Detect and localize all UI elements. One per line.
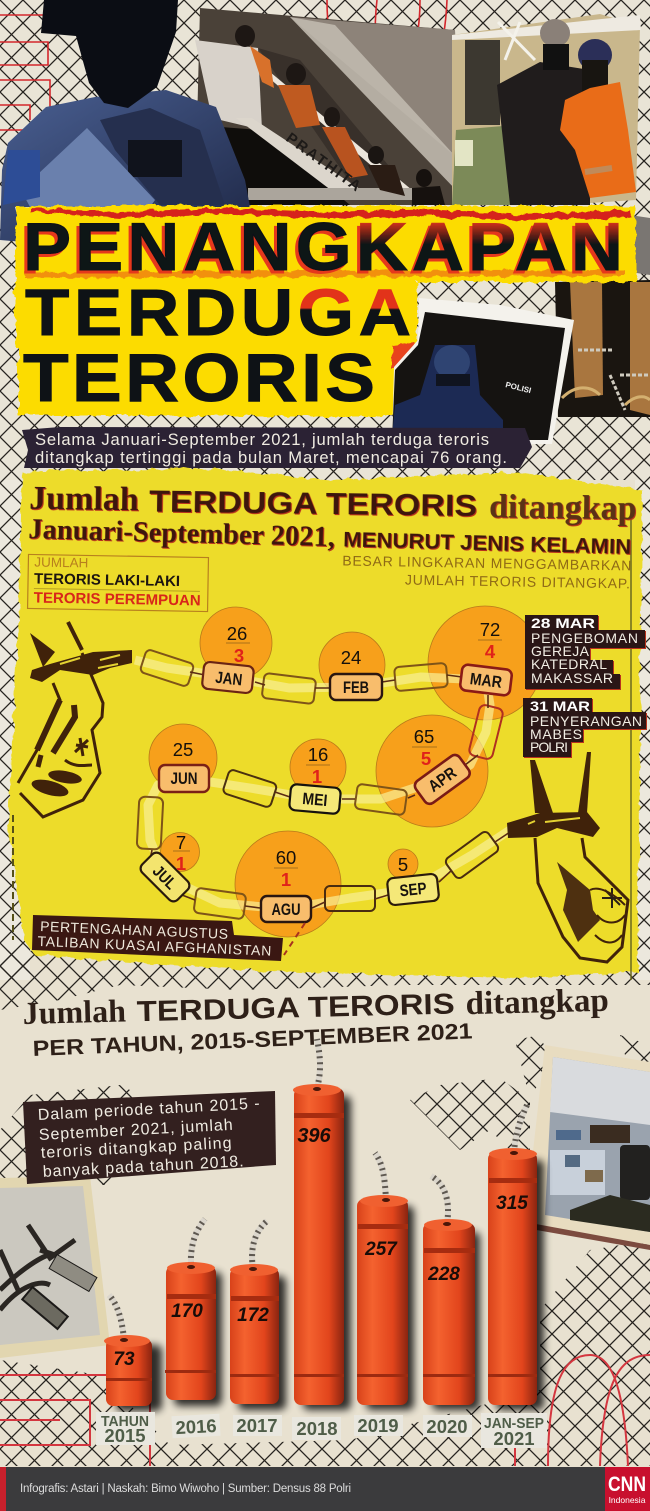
callout: 31 March bbox=[523, 698, 646, 757]
heading: annual: PER TAHUN, 2015-SEPTEMBER 2021 bbox=[32, 1018, 473, 1061]
legend: TERORIS LAKI-LAKI bbox=[34, 571, 180, 590]
bar 2021: 315 bbox=[496, 1193, 528, 1214]
chain links bbox=[137, 649, 504, 919]
callout: 28 March: PENGEBOMAN bbox=[531, 630, 638, 646]
June: JUN bbox=[170, 770, 198, 788]
title: TERDUGA bbox=[25, 275, 411, 349]
July: JUL bbox=[149, 862, 180, 893]
January: JAN bbox=[214, 669, 243, 689]
callout: 28 March bbox=[525, 615, 645, 689]
bubble values: 5 bbox=[398, 854, 408, 875]
May: MEI bbox=[302, 790, 328, 810]
chain glow bbox=[135, 660, 510, 909]
September: SEP bbox=[399, 880, 427, 900]
bubbles bbox=[149, 606, 542, 937]
CNN Indonesia logo bbox=[605, 1467, 650, 1511]
callout: 28 March: KATEDRAL bbox=[531, 656, 607, 672]
label 2019: 2019 bbox=[357, 1415, 399, 1436]
icon: left cuffed hand bbox=[18, 622, 132, 817]
intro text: ditangkap tertinggi pada bulan Maret, mencapai 76 orang. bbox=[35, 448, 507, 467]
January bbox=[202, 661, 254, 694]
bar 2016: 170 bbox=[171, 1301, 203, 1322]
callout: 31 March: MABES bbox=[530, 726, 582, 742]
April: APR bbox=[425, 764, 460, 796]
heading line 1: TERDUGA TERORIS bbox=[149, 483, 477, 523]
callout: yearly note: September 2021, jumlah bbox=[38, 1117, 233, 1144]
bar 2020 bbox=[423, 1176, 480, 1410]
bar 2021 bbox=[488, 1105, 544, 1410]
callout: yearly note bbox=[23, 1091, 276, 1184]
bubble values: 7 bbox=[176, 832, 186, 853]
legend bbox=[28, 554, 208, 612]
bubble values: 3 bbox=[234, 645, 244, 666]
intro text bbox=[22, 427, 532, 468]
bubble values: 65 bbox=[414, 726, 434, 747]
label 2021 bbox=[481, 1413, 547, 1449]
bar 2015: 73 bbox=[113, 1349, 135, 1370]
photo: seized documents bbox=[525, 1045, 650, 1250]
title: PENANGKAPAN bbox=[23, 209, 623, 285]
bar 2020: 228 bbox=[427, 1264, 460, 1285]
label 2018: 2018 bbox=[296, 1418, 338, 1439]
CNN Indonesia logo: Indonesia bbox=[609, 1495, 646, 1505]
heading: annual: ditangkap bbox=[465, 983, 609, 1022]
bubble values: 72 bbox=[480, 619, 500, 640]
year labels bbox=[96, 1412, 547, 1449]
August: AGU bbox=[272, 901, 300, 919]
bubble values: 4 bbox=[485, 641, 496, 662]
June bbox=[159, 765, 209, 792]
April bbox=[413, 753, 472, 806]
bubble values: 5 bbox=[421, 748, 431, 769]
bubble values: 1 bbox=[281, 869, 291, 890]
February bbox=[330, 674, 382, 700]
photo: soldier bbox=[0, 0, 250, 242]
bar 2018 bbox=[293, 1039, 351, 1410]
heading line 1: ditangkap bbox=[489, 488, 637, 527]
callout: Afghanistan: TALIBAN KUASAI AFGHANISTAN bbox=[37, 933, 272, 959]
July bbox=[138, 850, 192, 904]
month labels bbox=[138, 661, 512, 922]
callout: 31 March: PENYERANGAN bbox=[530, 713, 642, 729]
September bbox=[387, 873, 439, 906]
label 2021: JAN-SEP bbox=[484, 1415, 544, 1432]
March: MAR bbox=[469, 670, 503, 692]
size note: BESAR LINGKARAN MENGGAMBARKAN bbox=[342, 552, 631, 573]
title bbox=[23, 209, 623, 416]
March bbox=[460, 664, 512, 696]
photo: seized weapons bbox=[0, 1176, 110, 1358]
red wire decoration top bbox=[0, 0, 465, 130]
bar chart: dynamite sticks bbox=[104, 1039, 544, 1411]
red wire decoration bottom bbox=[0, 1350, 650, 1466]
margin marks bbox=[13, 515, 631, 980]
callout: 28 March: MAKASSAR bbox=[531, 670, 613, 686]
February: FEB bbox=[343, 679, 369, 697]
heading: annual bbox=[22, 981, 609, 1061]
title tapes bbox=[15, 206, 636, 416]
photo: shackled feet bbox=[555, 215, 650, 417]
May bbox=[289, 784, 341, 814]
bar 2019: 257 bbox=[364, 1239, 398, 1260]
bar 2017 bbox=[230, 1221, 286, 1410]
title: TERORIS bbox=[23, 340, 375, 416]
bubble values bbox=[173, 619, 502, 890]
photo: veiled woman bbox=[392, 298, 574, 445]
callout: 31 March: POLRI bbox=[530, 739, 568, 755]
label 2021: 2021 bbox=[493, 1428, 535, 1449]
size note: JUMLAH TERORIS DITANGKAP. bbox=[405, 572, 630, 591]
heading line 1: Jumlah bbox=[29, 480, 139, 518]
legend: JUMLAH bbox=[34, 555, 89, 570]
heading line 2: Januari-September 2021, bbox=[28, 514, 335, 553]
size note bbox=[342, 552, 631, 591]
August bbox=[261, 896, 311, 922]
callout: yearly note: Dalam periode tahun 2015 - bbox=[37, 1095, 260, 1124]
heading: annual: TERDUGA TERORIS bbox=[136, 988, 455, 1028]
bubble values: 25 bbox=[173, 739, 193, 760]
bubble values: 1 bbox=[312, 766, 322, 787]
label 2017: 2017 bbox=[236, 1415, 278, 1436]
police label: POLISI bbox=[505, 380, 532, 395]
bar 2016 bbox=[165, 1219, 222, 1406]
footer bbox=[0, 1467, 650, 1511]
callout: 31 March: 31 MAR bbox=[530, 698, 590, 714]
bubble values: 60 bbox=[276, 847, 296, 868]
heading line 2: MENURUT JENIS KELAMIN bbox=[343, 527, 631, 559]
photo: stairs with detainees bbox=[195, 8, 460, 205]
bar 2019 bbox=[357, 1153, 414, 1410]
footer: Infografis: Astari | Naskah: Bimo Wiwoho | Sumber: Densus 88 Polri bbox=[20, 1483, 351, 1495]
bar 2017: 172 bbox=[237, 1305, 269, 1326]
legend: TERORIS PEREMPUAN bbox=[34, 590, 201, 609]
label 2015 bbox=[96, 1412, 155, 1446]
bar 2015 bbox=[104, 1295, 162, 1411]
detainee figures bbox=[235, 25, 445, 205]
photo: orange-shirt suspect bbox=[452, 14, 641, 205]
callout: 28 March: GEREJA bbox=[531, 643, 590, 659]
label 2015: 2015 bbox=[104, 1425, 146, 1446]
heading line 1 bbox=[29, 480, 637, 527]
yellow paper bbox=[8, 468, 642, 978]
connector strokes bbox=[150, 672, 510, 908]
heading: annual: Jumlah bbox=[22, 992, 126, 1031]
bubble values: 26 bbox=[227, 623, 247, 644]
intro text: Selama Januari-September 2021, jumlah terduga teroris bbox=[35, 430, 489, 449]
callout: Afghanistan bbox=[32, 915, 305, 961]
callout: Afghanistan: PERTENGAHAN AGUSTUS bbox=[40, 918, 228, 942]
label 2020: 2020 bbox=[426, 1416, 468, 1437]
callout: yearly note: banyak pada tahun 2018. bbox=[42, 1153, 244, 1181]
panel: monthly arrests bbox=[8, 468, 646, 980]
bubble values: 1 bbox=[176, 853, 186, 874]
plane name: PRATHITA bbox=[283, 129, 364, 195]
callout: 28 March: 28 MAR bbox=[531, 615, 595, 631]
bubble values: 16 bbox=[308, 744, 328, 765]
bar 2018: 396 bbox=[297, 1125, 332, 1147]
icon: right cuffed hand bbox=[507, 752, 628, 962]
callout: yearly note: teroris ditangkap paling bbox=[40, 1135, 232, 1162]
heading line 2 bbox=[28, 514, 632, 561]
label 2015: TAHUN bbox=[101, 1413, 149, 1430]
label 2016: 2016 bbox=[175, 1415, 217, 1438]
bubble values: 24 bbox=[341, 647, 361, 668]
